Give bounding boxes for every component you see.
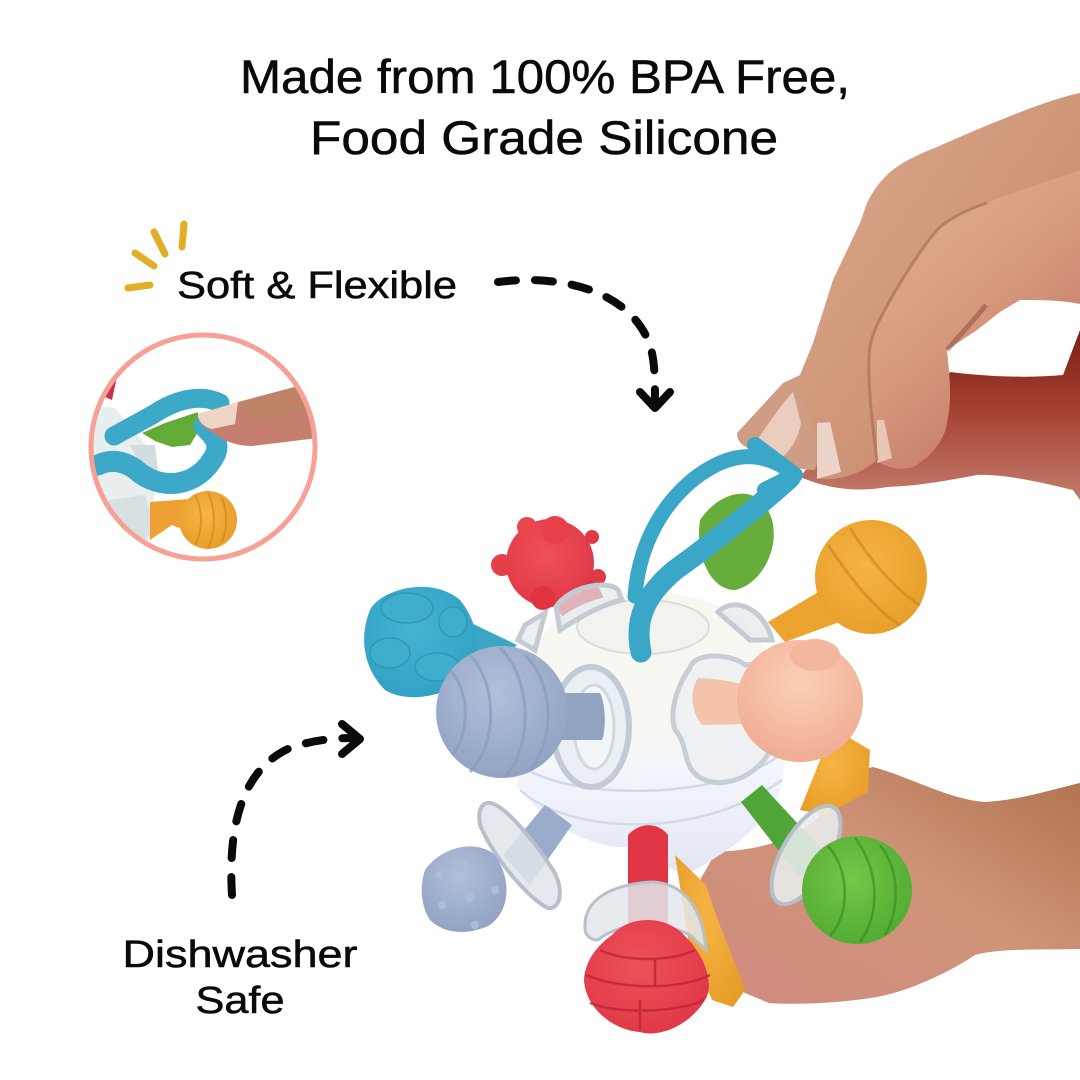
toy: amber lower paddle (675, 855, 745, 1007)
arrow: dishwasher safe to toy (231, 724, 360, 895)
toy: white lid (577, 600, 709, 654)
toy: body seams (520, 755, 782, 824)
toy: teal handle (635, 445, 795, 652)
knuckle shadow (947, 305, 986, 350)
toy: clear rings top (518, 585, 772, 650)
icon: sparkle rays (128, 224, 184, 288)
middle finger nail (877, 420, 892, 463)
toy: green rear knob (699, 494, 774, 590)
label: dishwasher safe: Dishwasher (122, 934, 358, 976)
inset: amber knob (150, 491, 237, 549)
label: soft and flexible: Soft & Flexible (177, 265, 457, 307)
inset: finger (198, 386, 318, 446)
hand: bottom supporting hand (700, 767, 1080, 1004)
title: Food Grade Silicone (310, 111, 778, 164)
inset circle: finger flexing handle (85, 335, 318, 559)
index finger nail (817, 422, 841, 479)
toy: white body (517, 592, 784, 875)
arrow: soft and flexible to toy (498, 280, 670, 408)
toy: green knob with ring (741, 785, 912, 944)
toy (364, 445, 927, 1033)
toy: amber upper knob (768, 520, 927, 642)
toy: blue knob (364, 587, 517, 697)
palm (800, 330, 1080, 500)
thumb nail (751, 392, 801, 457)
toy: grey knob with ring (436, 646, 629, 787)
inset: red knob fragment (106, 380, 116, 400)
toy: amber rear knob (800, 728, 870, 815)
index finger (799, 93, 1080, 479)
label: dishwasher safe (122, 934, 358, 1022)
label: dishwasher safe: Safe (196, 980, 284, 1022)
toy: red top knob (491, 516, 606, 620)
title: Made from 100% BPA Free, (240, 50, 850, 103)
inset: teal handle (98, 398, 220, 484)
thumb (737, 375, 830, 470)
finger crease (869, 203, 987, 461)
hand: top pinching hand (737, 93, 1080, 500)
inset: green knob (142, 412, 198, 447)
middle finger (869, 170, 1080, 469)
toy: peach knob with ring (673, 639, 863, 783)
inset: toy body and clear rings (94, 406, 155, 540)
toy: grey studded knob with ring (422, 803, 572, 932)
toy: red honey dipper with ring (584, 825, 710, 1033)
title (240, 50, 850, 164)
